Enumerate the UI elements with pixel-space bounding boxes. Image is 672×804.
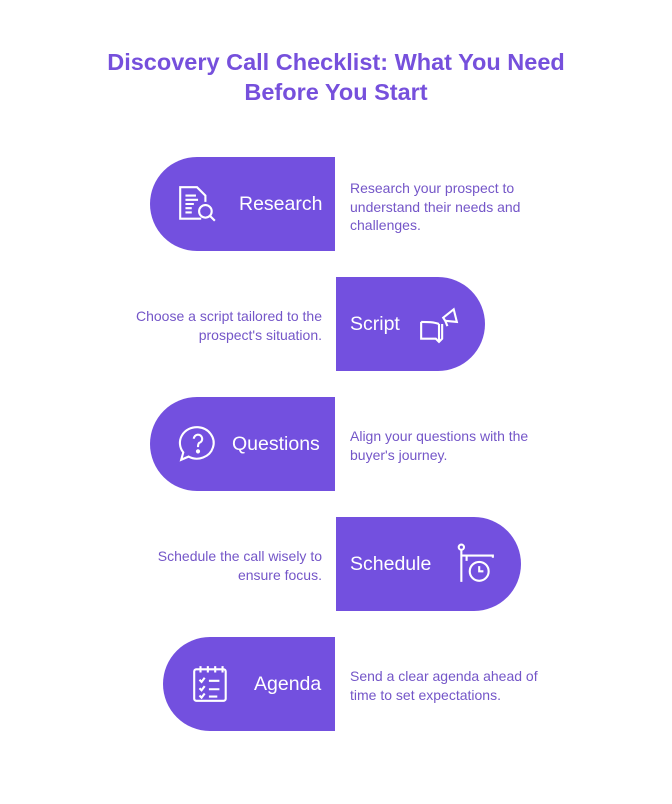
label: Agenda xyxy=(254,673,321,695)
text: agenda: time to set expectations. xyxy=(350,686,501,702)
text: research xyxy=(350,180,520,233)
icon: checklist calendar xyxy=(193,666,227,702)
text: questions: buyer's journey. xyxy=(350,446,447,462)
label: Research xyxy=(239,193,322,215)
icon: book megaphone xyxy=(420,308,458,344)
text: questions xyxy=(350,428,528,463)
text: agenda xyxy=(350,668,538,703)
text: research: understand their needs and xyxy=(350,198,520,214)
panel: agenda xyxy=(163,637,335,731)
panel: schedule xyxy=(336,517,521,611)
title: Before You Start xyxy=(244,79,428,105)
text: agenda: Send a clear agenda ahead of xyxy=(350,668,538,684)
text: research: challenges. xyxy=(350,217,421,233)
panel: research xyxy=(150,157,335,251)
title: Discovery Call Checklist: What You Need xyxy=(107,49,565,75)
label: Script xyxy=(350,313,400,335)
label: Schedule xyxy=(350,553,431,575)
panel: script xyxy=(336,277,485,371)
text: script: Choose a script tailored to the xyxy=(136,308,322,324)
text: schedule: ensure focus. xyxy=(238,566,322,582)
icon: clock sign xyxy=(458,544,494,582)
text: schedule xyxy=(158,548,322,582)
text: script: prospect's situation. xyxy=(199,326,322,342)
label: Questions xyxy=(232,433,320,455)
panel: questions xyxy=(150,397,335,491)
text: questions: Align your questions with the xyxy=(350,428,528,444)
text: research: Research your prospect to xyxy=(350,180,514,196)
title xyxy=(107,49,565,105)
icon: document search xyxy=(179,186,216,222)
text: schedule: Schedule the call wisely to xyxy=(158,548,322,564)
text: script xyxy=(136,308,322,343)
icon: speech question xyxy=(178,426,215,462)
